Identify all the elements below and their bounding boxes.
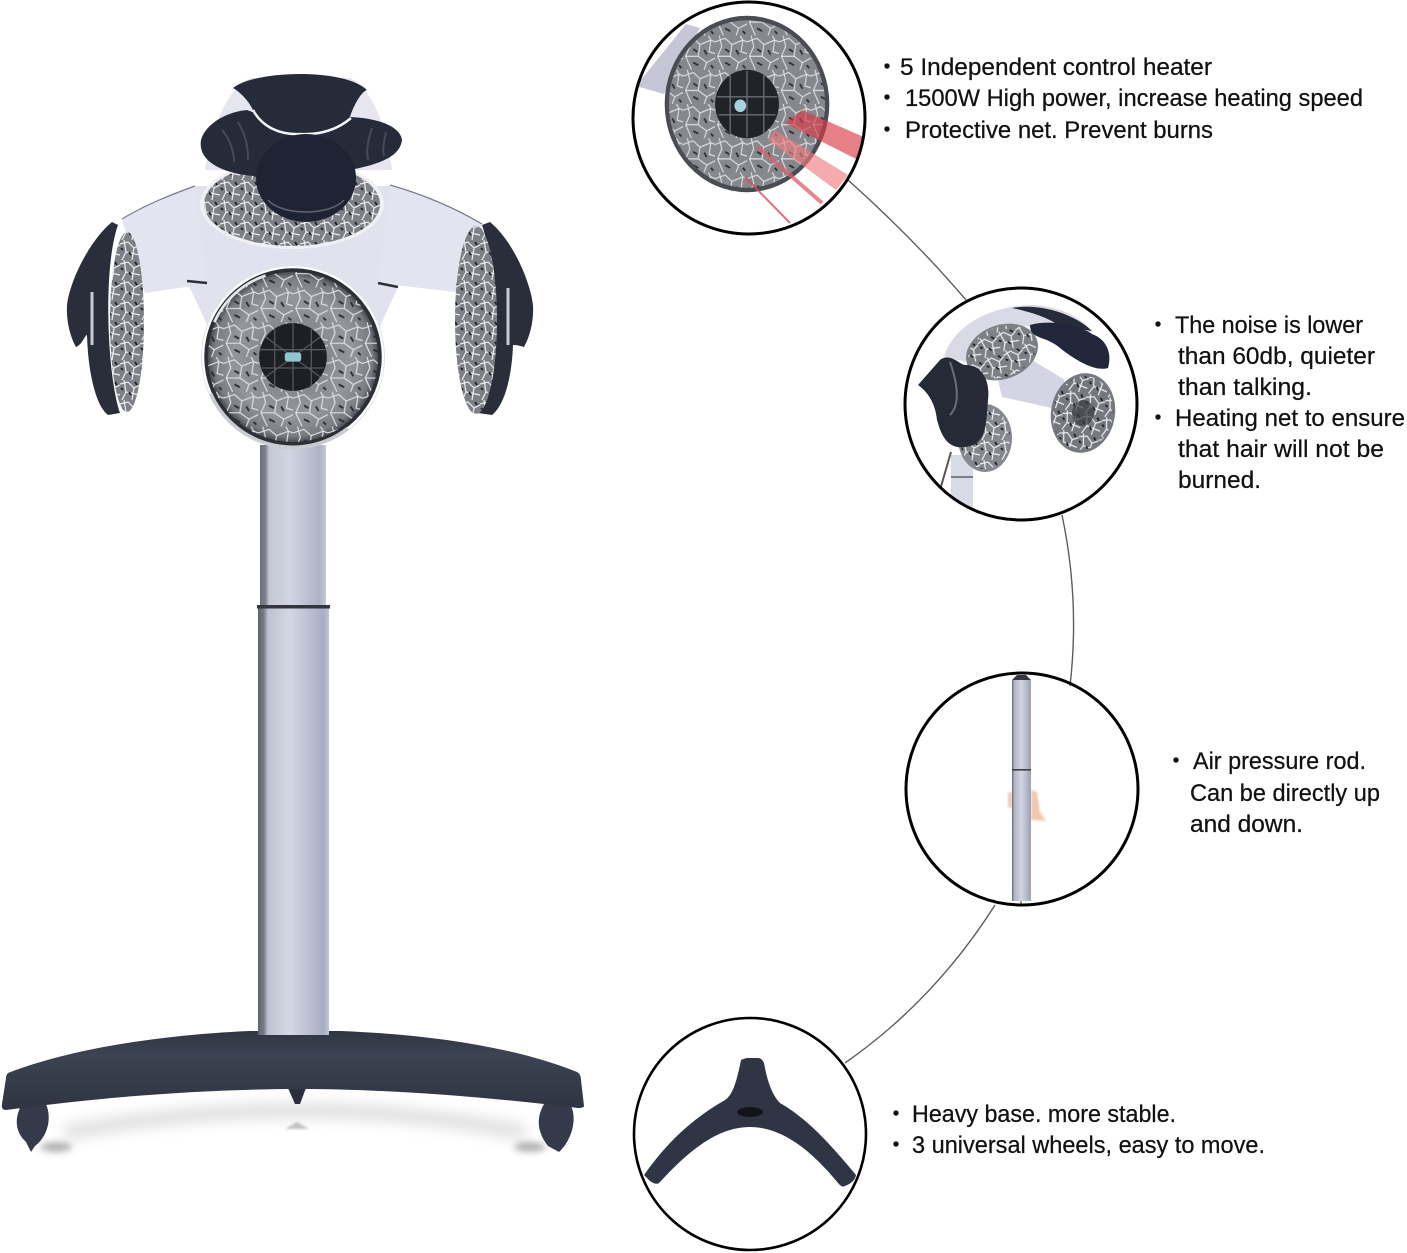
heater: top mesh: [200, 159, 384, 249]
text: heavy base: ・: [884, 1101, 908, 1128]
text: air pressure rod: [1164, 748, 1380, 838]
heater disc close-up: [665, 16, 829, 192]
connector lines: [845, 180, 1074, 1063]
text: heater features: 5 Independent control heater: [900, 54, 1212, 81]
heater: front disc: [202, 266, 384, 448]
detail circle: air pressure rod: [906, 673, 1138, 905]
bottom disc: [958, 404, 1012, 472]
base: [2, 1031, 584, 1110]
text: noise and heating net: than 60db, quieter: [1178, 343, 1375, 370]
text: noise and heating net: The noise is lower: [1175, 312, 1363, 339]
text: heater features: Protective net. Prevent burns: [905, 117, 1213, 144]
text: heavy base: 3 universal wheels, easy to move.: [912, 1132, 1265, 1159]
rod: [1012, 675, 1031, 905]
text: air pressure rod: and down.: [1190, 811, 1303, 838]
base top view: [644, 1058, 856, 1187]
detail circle: heads side view: [905, 288, 1137, 524]
text: heater features: ・: [875, 117, 899, 144]
dome: [944, 305, 1092, 362]
text: noise and heating net: than talking.: [1178, 374, 1312, 401]
text: heater features: ・: [875, 85, 899, 112]
heater: left side: [67, 222, 144, 415]
text: air pressure rod: Air pressure rod.: [1193, 748, 1366, 775]
text: noise and heating net: burned.: [1178, 467, 1261, 494]
product: hair processor stand: [2, 74, 584, 1152]
hand: [1008, 790, 1046, 821]
heater: top caps: [201, 74, 402, 222]
lower pole: [257, 605, 330, 1035]
red heat beams: [745, 110, 866, 223]
text: heater features: ・: [875, 54, 899, 81]
wheels: [17, 1088, 574, 1152]
arm: [998, 360, 1065, 408]
text: heater features: 1500W High power, increase heating speed: [905, 85, 1363, 112]
head: arms and body: [122, 78, 482, 400]
floor shadow: [40, 1106, 546, 1152]
dark caps: [918, 323, 1109, 447]
heater arm: [636, 24, 700, 94]
text: noise and heating net: [1146, 312, 1405, 494]
text: noise and heating net: ・: [1146, 312, 1170, 339]
text: heater features: [875, 54, 1363, 144]
text: air pressure rod: ・: [1164, 748, 1188, 775]
pole: [940, 452, 973, 508]
text: noise and heating net: that hair will not be: [1178, 436, 1384, 463]
text: noise and heating net: ・: [1146, 405, 1170, 432]
detail circle: heater: [633, 2, 866, 234]
top disc: [966, 324, 1038, 380]
text: heavy base: ・: [884, 1132, 908, 1159]
text: noise and heating net: Heating net to ensure: [1175, 405, 1405, 432]
upper pole: [260, 445, 326, 607]
detail circle: heavy base: [634, 1018, 866, 1250]
text: air pressure rod: Can be directly up: [1190, 780, 1380, 807]
right disc: [1050, 373, 1116, 453]
text: heavy base: Heavy base. more stable.: [912, 1101, 1176, 1128]
text: heavy base: [884, 1101, 1265, 1159]
heater: right side: [455, 222, 533, 415]
